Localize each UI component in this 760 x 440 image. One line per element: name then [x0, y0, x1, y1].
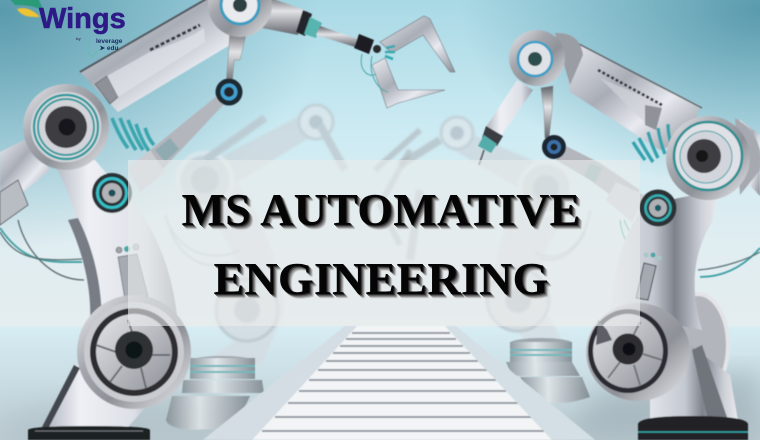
front left robot: [0, 0, 455, 440]
upper arm beam: [80, 0, 255, 112]
robot body upper: [610, 190, 718, 330]
gripper: [361, 16, 455, 108]
small joint: upper: [542, 135, 566, 159]
title line 2: ENGINEERING: [213, 253, 549, 304]
vertical rod to top joint: [226, 30, 247, 85]
top joint: [509, 30, 583, 86]
logo by: by: [76, 36, 81, 41]
front right robot: [478, 30, 760, 440]
base wheel joint: [586, 303, 690, 401]
upper arm beam: [562, 42, 702, 150]
left stub beam: [0, 138, 50, 196]
forearm rod: [556, 145, 646, 222]
robot body lower: [650, 345, 738, 420]
ghost robot: rear right base: [506, 338, 590, 403]
ghost robot: rear right: [400, 117, 590, 345]
logo leverage edu: [96, 38, 122, 52]
shoulder joint: [23, 84, 109, 170]
small joint: upper: [216, 78, 242, 106]
shoulder joint: [666, 116, 760, 200]
elbow vertical rod: [541, 86, 553, 138]
robot body upper: [50, 158, 178, 325]
base block: [28, 426, 150, 440]
rod between lower joints: [128, 95, 225, 185]
title line 1: MS AUTOMATIVE: [182, 184, 580, 235]
coil: teal cable: [112, 118, 154, 151]
right stub beam: [740, 120, 760, 196]
logo wordmark: Wings: [39, 3, 126, 35]
ghost robot: rear left base: [166, 356, 264, 430]
conveyor rails: [203, 326, 595, 440]
elbow joint: [92, 173, 132, 213]
rear wheel: [668, 294, 728, 396]
elbow joint: [640, 190, 676, 226]
translucent title panel: [128, 160, 640, 326]
robot body lower: [44, 365, 165, 427]
coil: teal cable: [633, 124, 671, 162]
status lights and panel: [116, 244, 148, 300]
forearm and collar: [262, 0, 374, 54]
base block: [638, 416, 748, 440]
wires: [620, 220, 760, 277]
conveyor belt: [203, 326, 595, 440]
logo mark: leverage check: [88, 39, 102, 57]
status lights and panel: [636, 252, 662, 300]
wires: [0, 220, 84, 280]
conveyor slats: [252, 326, 552, 440]
logo leverage edu: ➤ edu: [100, 45, 118, 52]
base wheel joint: [77, 295, 191, 409]
tool cylinder: [478, 80, 533, 165]
ghost robot: rear left: [165, 105, 420, 365]
logo mark: green and yellow ribbon: [9, 0, 43, 17]
top joint: [208, 0, 272, 37]
logo leverage edu: leverage: [96, 38, 122, 45]
